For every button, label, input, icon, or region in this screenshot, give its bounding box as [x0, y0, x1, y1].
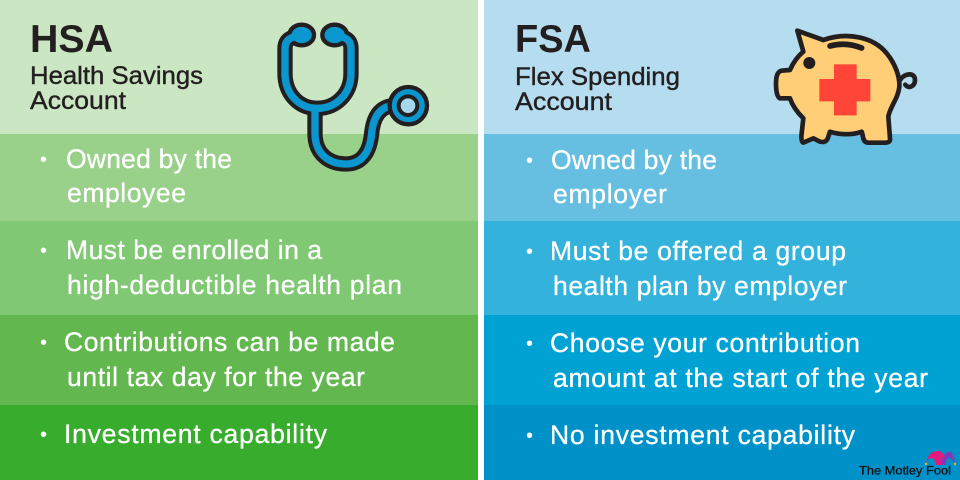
- FSA bullet 3: •: [526, 333, 533, 355]
- HSA bullet 1: Owned by the: [66, 144, 232, 174]
- panel: FSA: [484, 0, 960, 480]
- FSA band 2: [484, 221, 960, 315]
- HSA bullet 4: Investment capability: [64, 419, 328, 449]
- FSA bullet 1: [526, 145, 717, 209]
- FSA bullet 2: [526, 236, 847, 301]
- HSA bullet 3: until tax day for the year: [67, 362, 365, 392]
- FSA bullet 2: •: [526, 241, 533, 263]
- HSA bullet 3: [40, 327, 395, 392]
- HSA subtitle: Health Savings: [30, 62, 203, 90]
- FSA band 1: [484, 134, 960, 221]
- FSA bullet 3: amount at the start of the year: [553, 363, 928, 393]
- FSA subtitle: [515, 63, 680, 116]
- HSA band 4: [0, 405, 478, 480]
- HSA title: HSA: [30, 18, 113, 61]
- FSA band 4: [484, 405, 960, 480]
- FSA bullet 4: No investment capability: [550, 420, 856, 450]
- icon: piggy bank with medical cross: [776, 31, 915, 143]
- FSA subtitle: Account: [515, 88, 612, 116]
- HSA bullet 2: •: [40, 240, 47, 262]
- HSA bullet 3: Contributions can be made: [64, 327, 395, 357]
- HSA subtitle: Account: [30, 87, 126, 115]
- HSA bullet 4: •: [40, 424, 47, 446]
- FSA band 3: [484, 315, 960, 405]
- HSA band 2: [0, 221, 478, 315]
- FSA subtitle: Flex Spending: [515, 63, 680, 91]
- HSA bullet 1: [40, 144, 232, 208]
- logo wordmark: The Motley Fool: [859, 464, 951, 478]
- FSA bullet 4: •: [526, 425, 533, 447]
- panel: HSA: [0, 0, 478, 480]
- FSA title: FSA: [515, 18, 591, 61]
- FSA bullet 3: [526, 328, 928, 393]
- HSA band 1: [0, 134, 478, 221]
- HSA band 3: [0, 315, 478, 405]
- HSA bullet 2: [40, 235, 402, 300]
- FSA bullet 1: Owned by the: [551, 145, 717, 175]
- HSA header band: [0, 0, 478, 134]
- icon: stethoscope: [285, 25, 427, 164]
- HSA subtitle: [30, 62, 203, 115]
- FSA bullet 1: employer: [553, 179, 667, 209]
- HSA bullet 2: Must be enrolled in a: [66, 235, 322, 265]
- HSA bullet 2: high-deductible health plan: [67, 270, 402, 300]
- logo: The Motley Fool: [859, 451, 956, 478]
- HSA bullet 1: •: [40, 149, 47, 171]
- FSA bullet 3: Choose your contribution: [550, 328, 860, 358]
- FSA header band: [484, 0, 960, 134]
- HSA bullet 1: employee: [67, 178, 186, 208]
- icon: jester hat: [925, 451, 956, 465]
- HSA bullet 3: •: [40, 332, 47, 354]
- FSA bullet 1: •: [526, 150, 533, 172]
- FSA bullet 2: Must be offered a group: [550, 236, 846, 266]
- FSA bullet 2: health plan by employer: [553, 271, 847, 301]
